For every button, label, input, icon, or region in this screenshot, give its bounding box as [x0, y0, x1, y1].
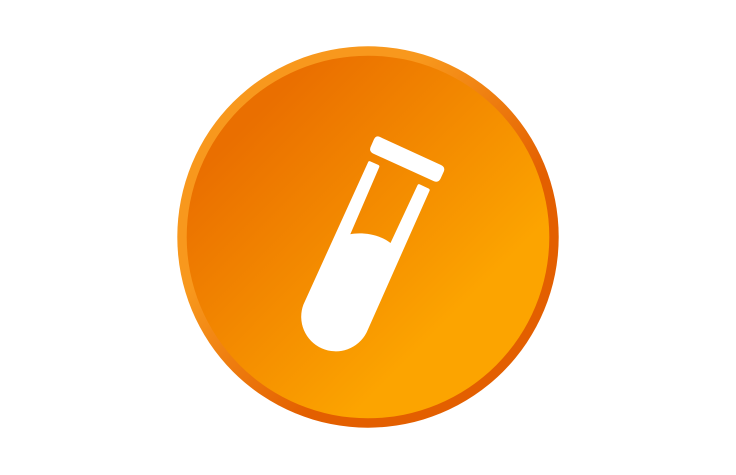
badge outer ring: [177, 46, 559, 428]
tube cap: [370, 136, 444, 182]
icon: test tube: [301, 136, 444, 351]
badge inner disc: [187, 56, 549, 418]
tube body with liquid: [301, 161, 430, 351]
